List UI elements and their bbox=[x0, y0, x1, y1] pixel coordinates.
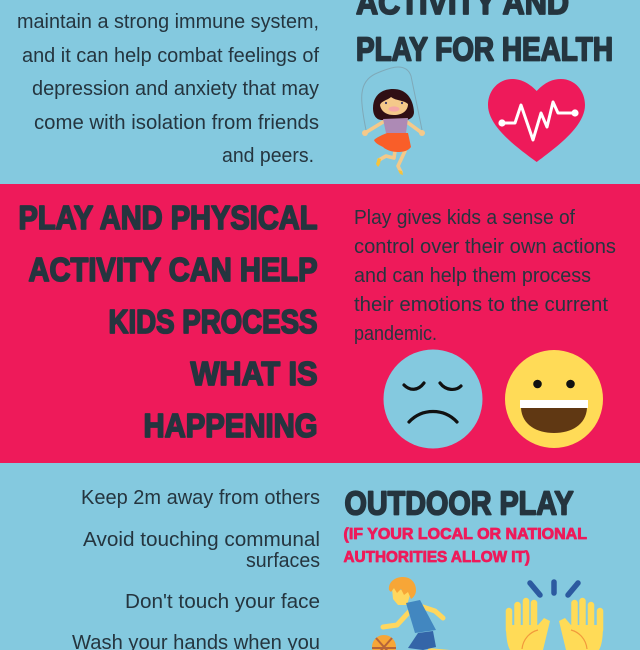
heading: play and physical activity can help: PLAY AND PHYSICAL bbox=[18, 199, 318, 236]
subheading: local authorities note bbox=[344, 526, 587, 566]
icon: girl skipping rope bbox=[362, 67, 425, 175]
text block: sense of control: their emotions to the current bbox=[354, 294, 608, 316]
panel: outdoor play bbox=[0, 463, 640, 650]
text block: safety guidance list: surfaces bbox=[246, 550, 320, 572]
icon: heart with pulse line bbox=[488, 79, 585, 162]
panel: process what is happening bbox=[0, 184, 640, 463]
icon: happy face bbox=[505, 350, 603, 448]
heading: play and physical activity can help: WHAT IS bbox=[190, 355, 318, 392]
text block: immune system benefits bbox=[17, 11, 319, 167]
heading: outdoor play: OUTDOOR PLAY bbox=[344, 484, 574, 522]
heading: play and physical activity can help bbox=[18, 199, 318, 444]
text block: immune system benefits: maintain a strong immune system, bbox=[17, 11, 319, 33]
icon: raised hands bbox=[506, 582, 603, 650]
text block: sense of control bbox=[354, 207, 616, 345]
text block: safety guidance list: Keep 2m away from others bbox=[81, 487, 320, 509]
text block: sense of control: control over their own actions bbox=[354, 236, 616, 258]
heading: play and physical activity can help: KIDS PROCESS bbox=[108, 303, 318, 340]
text block: immune system benefits: and it can help combat feelings of bbox=[22, 45, 319, 67]
heading: activity and play for health bbox=[356, 0, 613, 68]
heading: play and physical activity can help: ACTIVITY CAN HELP bbox=[28, 251, 318, 288]
text block: safety guidance list bbox=[72, 487, 320, 650]
icon: sad face bbox=[384, 350, 482, 448]
subheading: local authorities note: AUTHORITIES ALLOW IT) bbox=[344, 549, 530, 566]
text block: safety guidance list: Avoid touching communal bbox=[83, 529, 320, 551]
icon: child playing basketball bbox=[372, 577, 450, 650]
panel: physical activity for health bbox=[0, 0, 640, 184]
text block: safety guidance list: Don't touch your face bbox=[125, 591, 320, 613]
text block: sense of control: and can help them process bbox=[354, 265, 591, 287]
subheading: local authorities note: (IF YOUR LOCAL OR NATIONAL bbox=[344, 526, 587, 543]
text block: sense of control: pandemic. bbox=[354, 323, 437, 345]
text block: immune system benefits: depression and anxiety that may bbox=[32, 78, 319, 100]
text block: sense of control: Play gives kids a sense of bbox=[354, 207, 575, 229]
heading: play and physical activity can help: HAPPENING bbox=[144, 407, 318, 444]
text block: immune system benefits: come with isolation from friends bbox=[34, 112, 319, 134]
text block: immune system benefits: and peers. bbox=[222, 145, 314, 167]
